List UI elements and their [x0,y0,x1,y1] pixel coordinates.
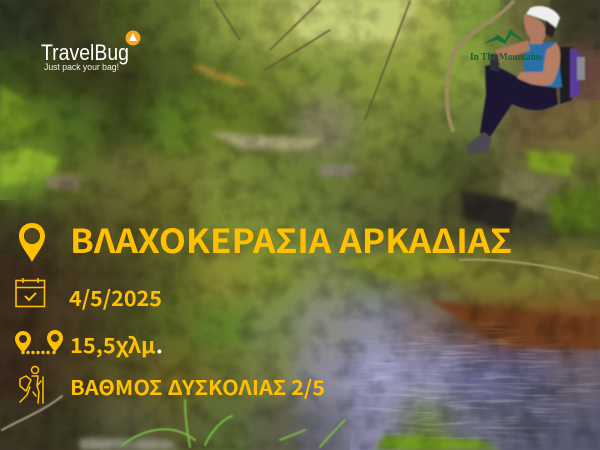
icon: logo bug badge [126,30,140,46]
TravelBug logo: TravelBug [41,40,129,65]
hiker in photo [466,6,585,155]
icon: calendar [16,278,44,306]
In The Mountains logo: In The Mountains [470,52,542,63]
icon: route between two pins [15,330,63,354]
TravelBug logo: Just pack your bag! [44,62,119,72]
TravelBug logo [41,30,140,72]
In The Mountains logo [470,29,542,63]
icon: hiker [20,366,43,403]
distance: 15,5χλμ. [70,330,163,360]
title: ΒΛΑΧΟΚΕΡΑΣΙΑ ΑΡΚΑΔΙΑΣ [70,215,512,263]
icon: location pin [19,223,45,262]
date: 4/5/2025 [69,283,162,313]
difficulty: ΒΑΘΜΟΣ ΔΥΣΚΟΛΙΑΣ 2/5 [70,372,325,401]
